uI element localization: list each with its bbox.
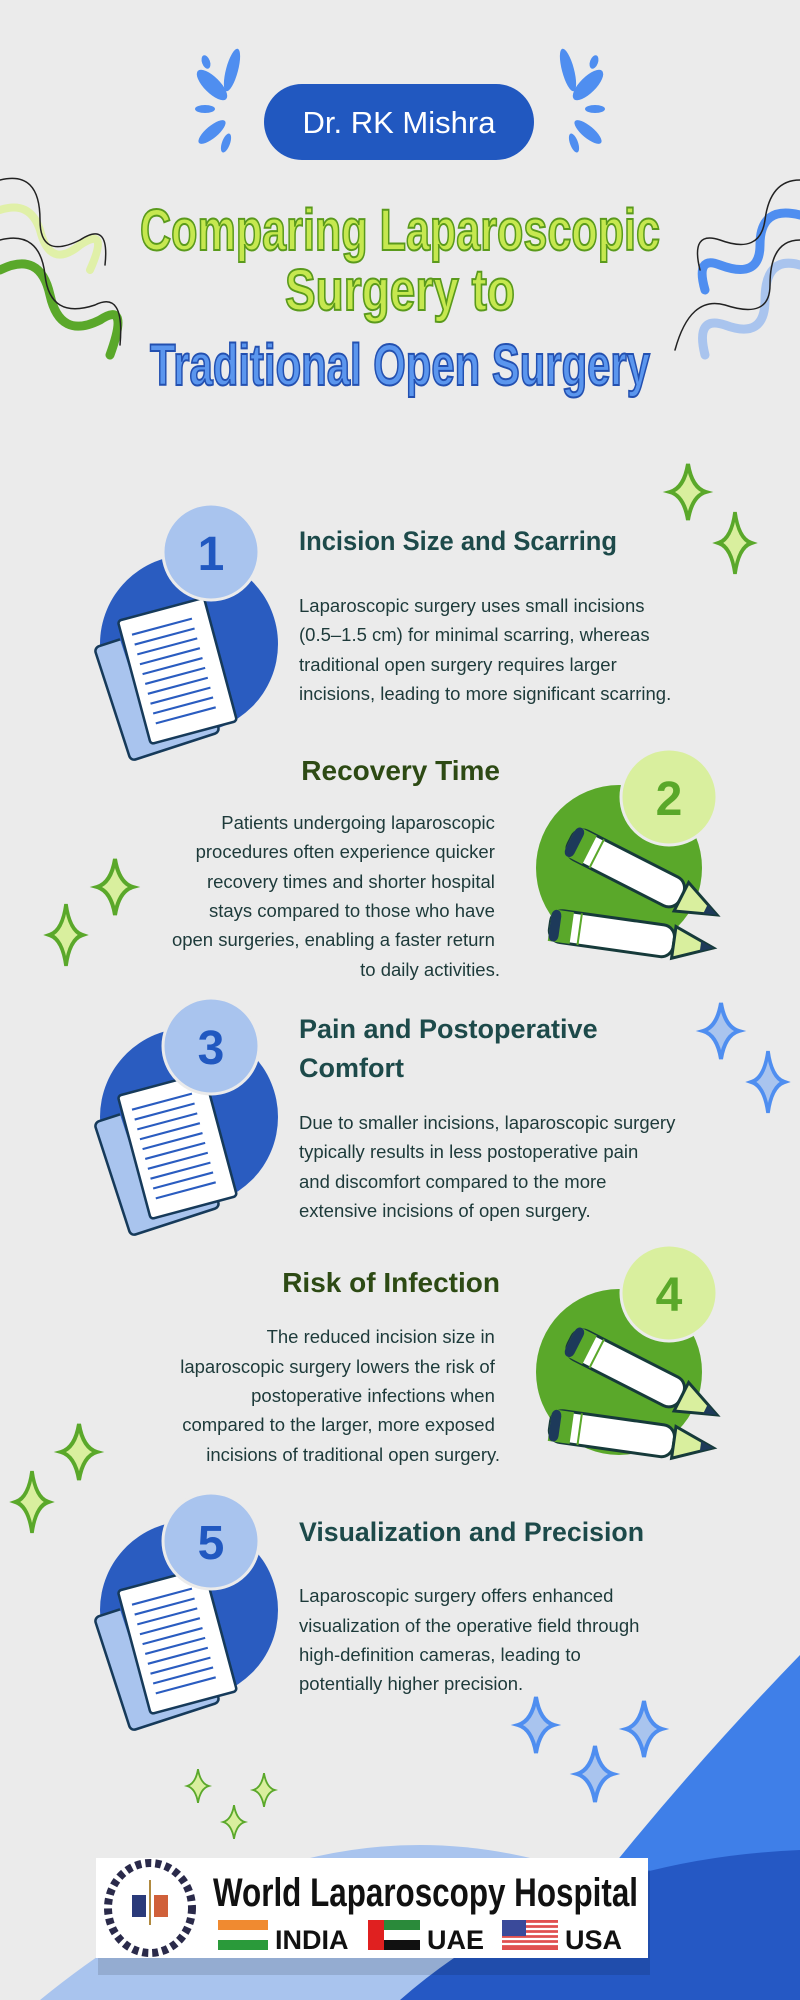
author badge: Dr. RK Mishra bbox=[303, 105, 496, 140]
body 2: open surgeries, enabling a faster return bbox=[172, 929, 495, 950]
heading 2: Recovery Time bbox=[301, 755, 500, 786]
flags row bbox=[218, 1920, 622, 1955]
body 4: laparoscopic surgery lowers the risk of bbox=[180, 1356, 496, 1377]
body 2: stays compared to those who have bbox=[209, 900, 495, 921]
icon: right splash marks bbox=[557, 47, 608, 154]
panel 2: recovery time bbox=[172, 749, 724, 980]
body 2: to daily activities. bbox=[360, 959, 500, 980]
author badge bbox=[264, 84, 534, 160]
body 2: Patients undergoing laparoscopic bbox=[221, 812, 495, 833]
body 4: postoperative infections when bbox=[251, 1385, 495, 1406]
bottom background shapes bbox=[40, 1655, 800, 2000]
heading 5: Visualization and Precision bbox=[299, 1517, 644, 1547]
heading 3: Comfort bbox=[299, 1053, 404, 1083]
body 4: compared to the larger, more exposed bbox=[182, 1414, 495, 1435]
decoration: right waves bbox=[675, 180, 800, 355]
illustration 5 bbox=[94, 1493, 278, 1731]
illustration 4: 4 bbox=[656, 1269, 683, 1322]
icon: left splash marks bbox=[192, 47, 243, 154]
flags row: INDIA bbox=[275, 1925, 348, 1955]
panel 4: infection bbox=[180, 1245, 724, 1465]
illustration 4 bbox=[536, 1245, 724, 1464]
heading 3: Pain and Postoperative bbox=[299, 1014, 598, 1044]
panel 1: incision size bbox=[94, 504, 671, 761]
body 2: procedures often experience quicker bbox=[196, 841, 495, 862]
heading 1: Incision Size and Scarring bbox=[299, 526, 617, 556]
footer logo bbox=[96, 1858, 650, 1975]
icon: green sparkles top right bbox=[670, 464, 751, 574]
icon: green sparkles bottom bbox=[187, 1769, 275, 1839]
icon: blue sparkles right bbox=[703, 1003, 784, 1113]
illustration 1 bbox=[94, 504, 278, 761]
panel 5: visualization bbox=[94, 1493, 645, 1731]
illustration 1: 1 bbox=[198, 528, 224, 581]
body 2: recovery times and shorter hospital bbox=[207, 871, 495, 892]
footer logo: World Laparoscopy Hospital bbox=[213, 1871, 638, 1915]
body 4: incisions of traditional open surgery. bbox=[206, 1444, 500, 1465]
illustration 3: 3 bbox=[198, 1022, 224, 1075]
title bbox=[140, 198, 660, 398]
body 4: The reduced incision size in bbox=[267, 1326, 495, 1347]
illustration 3 bbox=[94, 998, 278, 1236]
illustration 5: 5 bbox=[198, 1517, 224, 1570]
body 3: extensive incisions of open surgery. bbox=[299, 1200, 591, 1221]
illustration 2 bbox=[536, 749, 724, 964]
heading 4: Risk of Infection bbox=[282, 1267, 500, 1298]
body 1: (0.5–1.5 cm) for minimal scarring, whereas bbox=[299, 624, 650, 645]
flags row: UAE bbox=[427, 1925, 484, 1955]
emblem bbox=[108, 1863, 192, 1953]
body 5: high-definition cameras, leading to bbox=[299, 1644, 581, 1665]
body 3: Due to smaller incisions, laparoscopic surgery bbox=[299, 1112, 676, 1133]
body 5: potentially higher precision. bbox=[299, 1673, 523, 1694]
body 3: and discomfort compared to the more bbox=[299, 1171, 606, 1192]
body 1: incisions, leading to more significant scarring. bbox=[299, 683, 671, 704]
illustration 2: 2 bbox=[656, 773, 682, 826]
body 1: Laparoscopic surgery uses small incisions bbox=[299, 595, 644, 616]
flags row: USA bbox=[565, 1925, 622, 1955]
icon: green sparkles left lower bbox=[16, 1424, 97, 1533]
decoration: left waves bbox=[0, 178, 121, 355]
panel 3: pain bbox=[94, 998, 680, 1236]
body 5: visualization of the operative field through bbox=[299, 1615, 639, 1636]
icon: blue sparkles bottom bbox=[518, 1697, 662, 1802]
body 1: traditional open surgery requires larger bbox=[299, 654, 617, 675]
body 3: typically results in less postoperative pain bbox=[299, 1141, 638, 1162]
title: Surgery to bbox=[285, 258, 515, 323]
body 5: Laparoscopic surgery offers enhanced bbox=[299, 1585, 613, 1606]
icon: green sparkles left bbox=[50, 859, 133, 966]
